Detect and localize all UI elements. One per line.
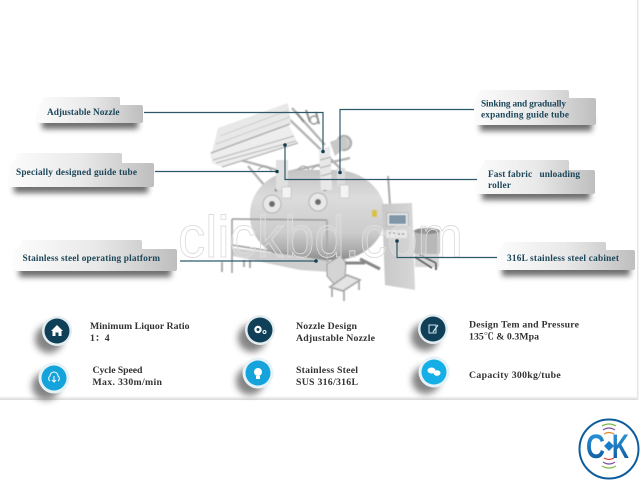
spec: minimum liquor ratio: 1：4 [90, 333, 110, 344]
spec: stainless steel: Stainless Steel [296, 365, 358, 376]
icon: cloud download [32, 362, 70, 400]
spec: cycle speed [32, 362, 163, 400]
icon: home [35, 316, 72, 353]
logo letters: C [586, 428, 605, 466]
label: Sinking and gradually expanding guide tube: Sinking and gradually [481, 100, 566, 110]
leader: adjustable nozzle [144, 112, 325, 153]
spec: nozzle design: Adjustable Nozzle [296, 333, 376, 344]
machine illustration [210, 103, 440, 301]
nozzle columns [276, 136, 349, 198]
label: 316L stainless steel cabinet: 316L stainless steel cabinet [507, 254, 620, 264]
control cabinet [382, 203, 415, 290]
watermark: clickbd.com [178, 205, 463, 270]
leader: platform [180, 259, 318, 263]
spec: minimum liquor ratio [35, 316, 190, 353]
icon: light bulb [236, 358, 274, 395]
logo: clickbd badge [580, 420, 638, 478]
small tank [414, 228, 440, 270]
label: Adjustable Nozzle: Adjustable Nozzle [47, 108, 120, 118]
icon: note with pen [411, 314, 448, 351]
spec: design temperature and pressure [411, 314, 580, 351]
yellow tag [372, 210, 377, 217]
logo signal arcs [602, 424, 616, 468]
spec: stainless steel [236, 358, 358, 395]
label: Fast fabric unloading roller [477, 160, 595, 200]
spec: nozzle design [238, 315, 376, 352]
step stool [330, 275, 360, 301]
support frame and pipework [240, 108, 390, 205]
leader: unloading roller [283, 143, 478, 180]
spec: stainless steel: SUS 316/316L [296, 377, 358, 388]
logo: clickbd badge: K [612, 428, 629, 466]
label: Specially designed guide tube [9, 153, 154, 193]
leader: guide tube [155, 170, 279, 173]
spec: nozzle design: Nozzle Design [296, 321, 358, 332]
label: Stainless steel operating platform [14, 240, 177, 277]
label: Specially designed guide tube: Specially designed guide tube [16, 168, 137, 178]
main vessel [250, 170, 385, 260]
label: Sinking and gradually expanding guide tube: expanding guide tube [481, 110, 569, 120]
leader lines [144, 110, 498, 263]
label: 316L stainless steel cabinet [497, 242, 635, 276]
vessel ports [263, 187, 327, 213]
spec: design temperature and pressure: 135℃ & 0.3Mpa [469, 330, 539, 342]
icon: gears [238, 315, 275, 352]
label: Fast fabric unloading roller: roller [488, 181, 511, 191]
spec: capacity [412, 356, 561, 394]
spec: minimum liquor ratio: Minimum Liquor Ratio [90, 321, 190, 332]
spec: cycle speed: Cycle Speed [92, 365, 143, 376]
spec: capacity: Capacity 300kg/tube [469, 370, 561, 381]
leader: sinking guide tube [338, 110, 474, 174]
label: Stainless steel operating platform: Stainless steel operating platform [22, 254, 160, 264]
leader: cabinet [395, 239, 498, 258]
folding tray [210, 103, 298, 167]
platform and railing [222, 219, 346, 284]
label: Fast fabric unloading roller: Fast fabric unloading [488, 170, 580, 180]
spec: design temperature and pressure: Design Tem and Pressure [469, 320, 580, 330]
vessel feet [345, 259, 380, 269]
label: Sinking and gradually expanding guide tube [474, 90, 596, 131]
icon: speech bubbles [412, 356, 450, 394]
spec: cycle speed: Max. 330m/min [92, 377, 163, 388]
label: Adjustable Nozzle [38, 97, 143, 129]
